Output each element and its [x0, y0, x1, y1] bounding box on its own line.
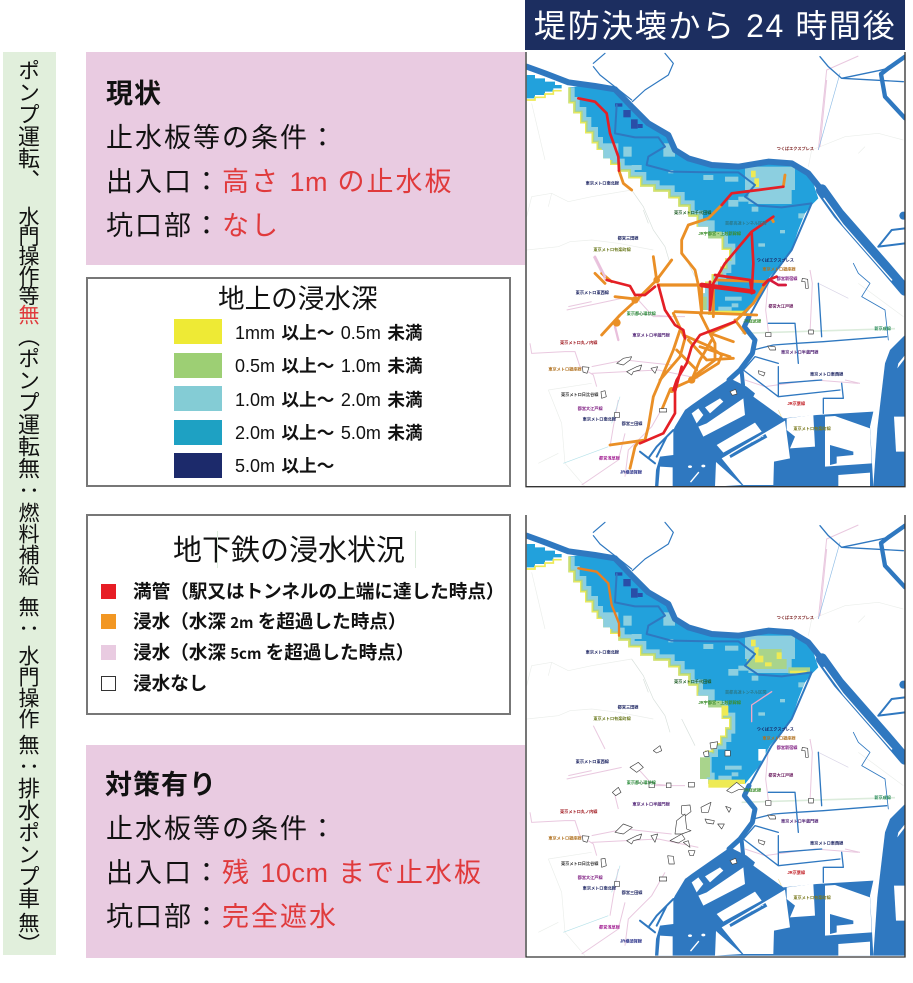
- map: current state: [525, 52, 906, 488]
- line name labels: with countermeasures: 都営三田線: [618, 703, 639, 709]
- line name labels: current state: 東京メトロ有楽町線: [793, 425, 832, 431]
- label 1.0m to 2.0m: 1.0m 以上～ 2.0m 未満: [235, 390, 423, 410]
- swatch navy: [174, 453, 222, 478]
- line name labels: with countermeasures: 東京メトロ半蔵門線: [781, 817, 819, 823]
- label 2m: 浸水（水深 2m を超過した時点）: [133, 607, 406, 634]
- label 5cm: 浸水（水深 5cm を超過した時点）: [133, 638, 414, 665]
- label 2.0m to 5.0m: 2.0m 以上～ 5.0m 未満: [235, 423, 423, 443]
- line name labels: with countermeasures: 東京メトロ南北線: [586, 648, 620, 654]
- header: 24 hours after levee breach: 堤防決壊から 24 時間後: [534, 8, 896, 44]
- line name labels: current state: 都営新宿線: [777, 275, 798, 281]
- panel: with countermeasures: [86, 745, 525, 958]
- label 5.0m and above: 5.0m 以上～: [235, 456, 334, 476]
- label full: 満管（駅又はトンネルの上端に達した時点）: [133, 577, 505, 604]
- line name labels: current state: 東京メトロ南北線: [586, 179, 620, 185]
- line name labels: current state: 東京メトロ半蔵門線: [781, 348, 819, 354]
- sidebar: pump and floodgate conditions: ）: [15, 933, 40, 955]
- sidebar: pump and floodgate conditions: 無: [16, 734, 39, 755]
- station outlines: [582, 742, 813, 886]
- line name labels: with countermeasures: JR総武線: [743, 787, 762, 793]
- line name labels: with countermeasures: 新京成線: [874, 794, 892, 800]
- subway status lines: with countermeasures: [578, 568, 813, 886]
- legend: subway flood status: [86, 514, 511, 715]
- marker white: [101, 676, 116, 691]
- line name labels: with countermeasures: 東京メトロ銀座線: [762, 735, 796, 741]
- line name labels: with countermeasures: 東京メトロ東西線: [810, 840, 844, 846]
- line name labels: with countermeasures: 都営大江戸線: [768, 772, 794, 778]
- portal condition: 坑口部：完全遮水: [106, 902, 338, 932]
- line name labels: with countermeasures: 東京メトロ半蔵門線: [632, 801, 671, 807]
- line name labels: with countermeasures: JR京葉線: [787, 869, 806, 875]
- swatch blue: [174, 420, 222, 445]
- sidebar: pump and floodgate conditions: 無: [16, 596, 39, 617]
- panel heading: 対策有り: [105, 770, 217, 800]
- swatch green: [174, 353, 222, 378]
- line name labels: with countermeasures: 東京メトロ千代田線: [674, 678, 712, 684]
- map base: [527, 52, 907, 487]
- entrance condition: 出入口：残 10cm まで止水板: [106, 858, 483, 888]
- legend: surface flood depth: [86, 277, 511, 487]
- line name labels: with countermeasures: 東京メトロ有楽町線: [593, 715, 632, 721]
- line name labels: current state: 都営大江戸線: [578, 405, 603, 411]
- line name labels: with countermeasures: 都営新宿線: [777, 744, 798, 750]
- line name labels: with countermeasures: 東京メトロ日比谷線: [561, 860, 599, 866]
- sidebar: pump and floodgate conditions: [3, 52, 56, 955]
- line name labels: current state: 東京メトロ銀座線: [548, 366, 582, 372]
- legend title: 地下鉄の浸水状況: [173, 535, 405, 567]
- line name labels: current state: [548, 145, 892, 474]
- line name labels: current state: 新京成線: [874, 325, 892, 331]
- portal condition: 坑口部：なし: [106, 211, 280, 241]
- marker red: [101, 584, 116, 599]
- line name labels: current state: 東京都心環状線: [627, 310, 657, 316]
- line name labels: with countermeasures: 東京メトロ銀座線: [548, 835, 582, 841]
- line name labels: current state: 東京メトロ東西線: [810, 371, 844, 377]
- line name labels: current state: 東京メトロ丸ノ内線: [560, 339, 598, 345]
- subway status lines: current state: [578, 98, 813, 468]
- line name labels: current state: JR総武線: [743, 318, 762, 324]
- map: with countermeasures: [525, 515, 906, 958]
- sidebar: pump and floodgate conditions: 無: [16, 912, 39, 933]
- line name labels: current state: 東京メトロ半蔵門線: [632, 332, 671, 338]
- sidebar: pump and floodgate conditions: 水門操作: [16, 645, 39, 729]
- line name labels: current state: 東京メトロ日比谷線: [561, 391, 599, 397]
- line name labels: current state: つくばエクスプレス: [757, 257, 794, 263]
- line name labels: current state: 都営浅草線: [599, 454, 621, 460]
- panel heading: 現状: [106, 79, 162, 109]
- line name labels: current state: 都営三田線: [618, 234, 639, 240]
- line name labels: with countermeasures: 東京メトロ東西線: [576, 758, 610, 764]
- line name labels: current state: 首都高速トンネル区間: [725, 219, 766, 225]
- line name labels: current state: 東京メトロ千代田線: [674, 209, 712, 215]
- line name labels: with countermeasures: 東京メトロ有楽町線: [793, 894, 832, 900]
- line name labels: current state: JR宇都宮・上越新幹線: [698, 230, 742, 236]
- swatch light blue: [174, 386, 222, 411]
- line name labels: with countermeasures: JR横須賀線: [620, 937, 643, 943]
- line name labels: current state: つくばエクスプレス: [777, 145, 814, 151]
- label 1mm to 0.5m: 1mm 以上～ 0.5m 未満: [235, 323, 423, 343]
- line name labels: current state: 東京メトロ銀座線: [762, 266, 796, 272]
- condition heading: 止水板等の条件：: [106, 123, 338, 153]
- map frame: [526, 515, 905, 957]
- entrance condition: 出入口：高さ 1m の止水板: [106, 167, 454, 197]
- sidebar: pump and floodgate conditions: 水門操作等: [16, 206, 39, 304]
- line name labels: current state: JR京葉線: [787, 400, 806, 406]
- map base: [527, 515, 907, 957]
- sidebar: pump and floodgate conditions: ポンプ運転、: [15, 59, 40, 191]
- line name labels: with countermeasures: 東京都心環状線: [627, 779, 657, 785]
- line name labels: with countermeasures: [548, 614, 892, 943]
- line name labels: current state: 東京メトロ南北線: [583, 416, 617, 422]
- map frame: [526, 52, 905, 487]
- line name labels: with countermeasures: 東京メトロ南北線: [583, 885, 617, 891]
- swatch yellow: [174, 319, 222, 344]
- line name labels: with countermeasures: 都営大江戸線: [578, 874, 603, 880]
- panel: current state: [86, 52, 525, 265]
- line name labels: with countermeasures: JR宇都宮・上越新幹線: [698, 699, 742, 705]
- line name labels: with countermeasures: 首都高速トンネル区間: [725, 688, 766, 694]
- line name labels: with countermeasures: 東京メトロ丸ノ内線: [560, 808, 598, 814]
- sidebar: pump and floodgate conditions: 無: [16, 304, 39, 325]
- sidebar: pump and floodgate conditions: （ポンプ運転無：: [15, 325, 40, 501]
- label none: 浸水なし: [133, 669, 207, 696]
- header: 24 hours after levee breach: [525, 0, 905, 50]
- station outlines: [582, 278, 813, 417]
- line name labels: current state: 東京メトロ東西線: [576, 289, 610, 295]
- line name labels: current state: 都営三田線: [622, 420, 643, 426]
- line name labels: with countermeasures: つくばエクスプレス: [777, 614, 814, 620]
- line name labels: current state: 都営大江戸線: [768, 303, 794, 309]
- line name labels: with countermeasures: 都営浅草線: [599, 923, 621, 929]
- line name labels: current state: JR横須賀線: [620, 468, 643, 474]
- sidebar: pump and floodgate conditions: ：: [15, 617, 40, 639]
- label 0.5m to 1.0m: 0.5m 以上～ 1.0m 未満: [235, 356, 423, 376]
- legend title: 地上の浸水深: [218, 284, 378, 314]
- line name labels: current state: 東京メトロ有楽町線: [593, 246, 632, 252]
- sidebar: pump and floodgate conditions: 排水ポンプ車: [15, 777, 40, 909]
- sidebar: pump and floodgate conditions: 燃料補給: [16, 502, 39, 586]
- marker pink: [101, 645, 116, 660]
- sidebar: pump and floodgate conditions: ：: [15, 755, 40, 777]
- line name labels: with countermeasures: つくばエクスプレス: [757, 726, 794, 732]
- condition heading: 止水板等の条件：: [106, 814, 338, 844]
- line name labels: with countermeasures: 都営三田線: [622, 889, 643, 895]
- marker orange: [101, 614, 116, 629]
